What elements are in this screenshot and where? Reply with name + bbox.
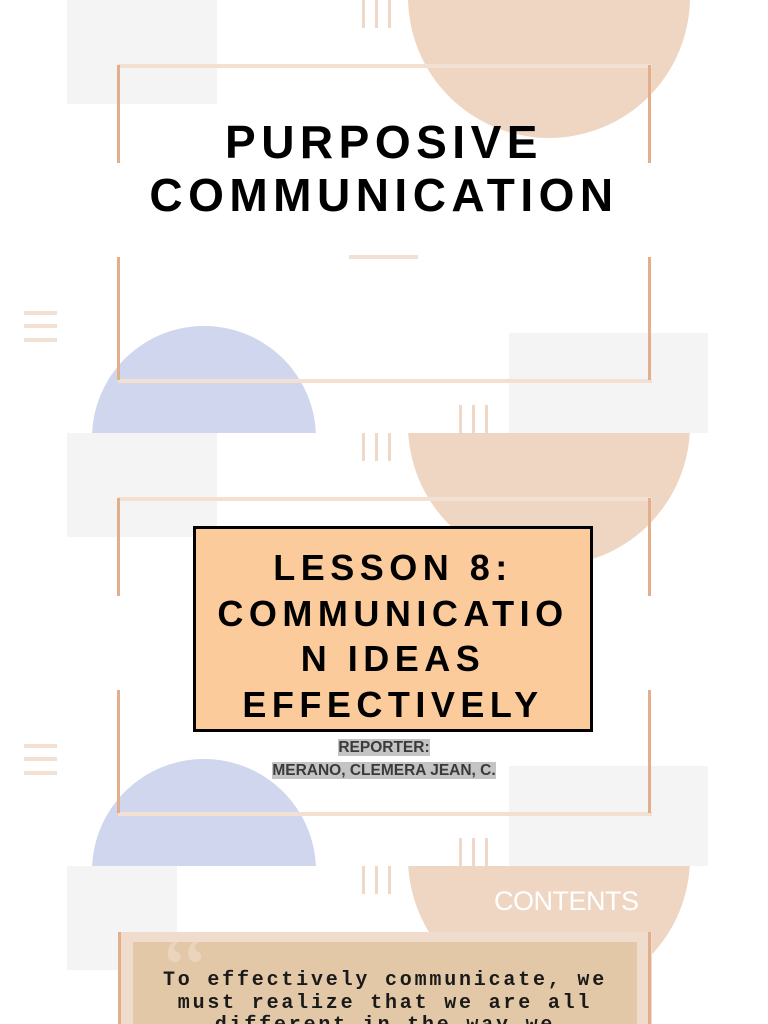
title: PURPOSIVE: [225, 116, 543, 168]
quote box: [118, 932, 652, 1024]
quote box: must realize that we are all: [178, 992, 592, 1014]
reporter: [272, 739, 496, 779]
lesson title box: LESSON 8:: [273, 547, 513, 588]
reporter: REPORTER:: [338, 739, 430, 756]
title: COMMUNICATION: [149, 169, 619, 221]
lesson title box: N IDEAS: [301, 638, 485, 679]
reporter: MERANO, CLEMERA JEAN, C.: [272, 762, 496, 779]
slide 3: contents: [0, 866, 768, 1024]
slide 2: lesson: [0, 433, 768, 866]
slide 1: title: [0, 0, 768, 433]
lesson title box: COMMUNICATIO: [217, 592, 569, 634]
lesson title box: [193, 526, 593, 732]
quote box: To effectively communicate, we: [163, 969, 607, 992]
lesson title box: EFFECTIVELY: [242, 684, 544, 724]
contents heading: CONTENTS: [494, 886, 638, 916]
title: [149, 116, 619, 221]
